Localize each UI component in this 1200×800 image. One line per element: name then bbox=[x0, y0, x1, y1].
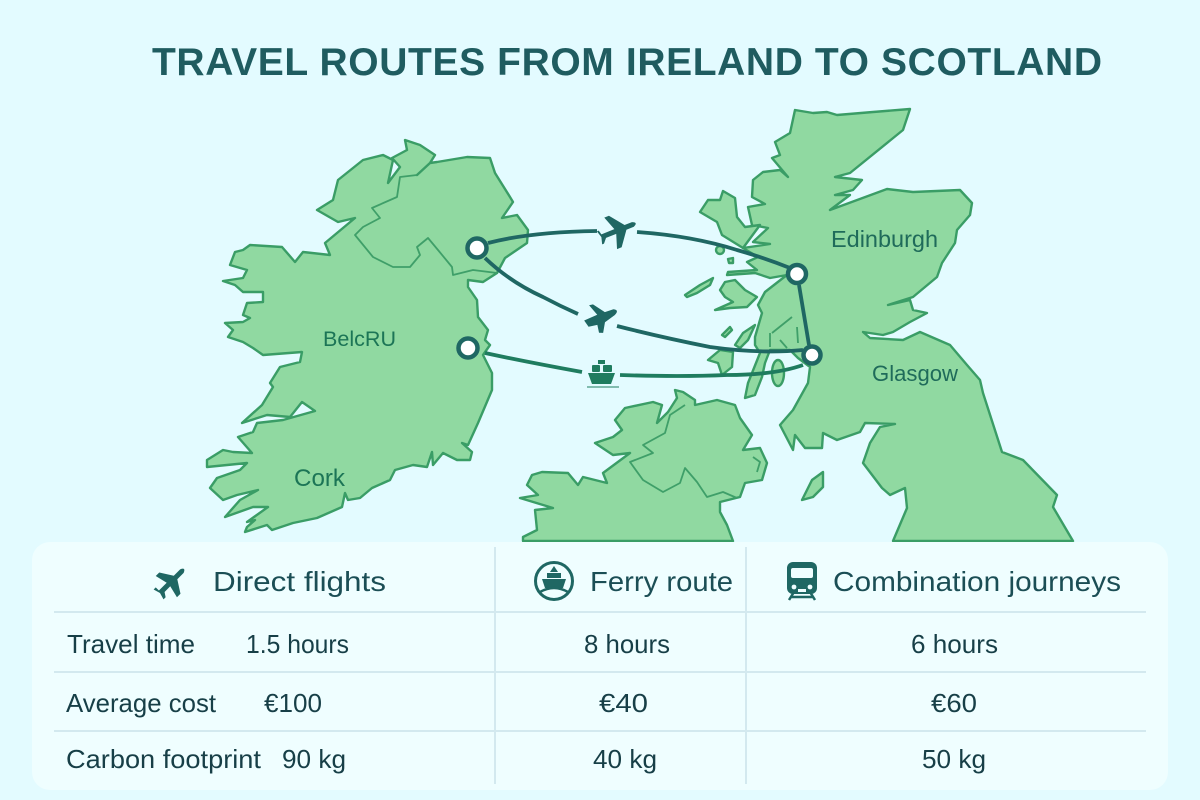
row: average cost: €60 bbox=[931, 688, 977, 718]
row: average cost: €40 bbox=[599, 688, 648, 718]
map: Scotland and northern England bbox=[685, 109, 1073, 541]
place labels: Glasgow bbox=[872, 361, 958, 386]
icon: plane on southern route bbox=[581, 300, 621, 336]
icon: ferry on route bbox=[587, 360, 619, 387]
row: carbon footprint: 40 kg bbox=[593, 744, 657, 774]
place labels: Edinburgh bbox=[831, 226, 938, 252]
panel: comparison table bbox=[32, 542, 1168, 790]
map: lower Ireland inset bbox=[520, 390, 767, 541]
row: carbon footprint: Carbon footprint bbox=[66, 744, 262, 774]
place labels bbox=[294, 226, 958, 492]
icon: ferry badge bbox=[536, 562, 572, 600]
route stops bbox=[458, 238, 820, 364]
row: travel time: 6 hours bbox=[911, 629, 998, 659]
icon: direct flights plane bbox=[148, 558, 195, 605]
row: travel time: 8 hours bbox=[584, 629, 670, 659]
flight route: northern bbox=[488, 231, 790, 268]
row: average cost bbox=[66, 688, 977, 718]
connection between Scottish stops bbox=[799, 285, 809, 345]
place labels: BelcRU bbox=[323, 328, 396, 351]
heading: ferry route: Ferry route bbox=[590, 566, 733, 597]
row: average cost: €100 bbox=[264, 688, 322, 718]
row: carbon footprint: 50 kg bbox=[922, 744, 986, 774]
place labels: Cork bbox=[294, 465, 346, 492]
heading: direct flights: Direct flights bbox=[213, 566, 386, 597]
icon: plane on northern route bbox=[593, 207, 642, 254]
title: TRAVEL ROUTES FROM IRELAND TO SCOTLAND bbox=[152, 41, 1102, 84]
ferry route bbox=[485, 353, 803, 376]
row: travel time: 1.5 hours bbox=[246, 629, 349, 659]
row: travel time bbox=[67, 629, 998, 659]
Irish border bbox=[355, 175, 497, 275]
row: travel time: Travel time bbox=[67, 629, 195, 659]
icon: train bbox=[787, 562, 817, 600]
row: carbon footprint: 90 kg bbox=[282, 744, 346, 774]
heading: combination journeys: Combination journeys bbox=[833, 566, 1121, 597]
row: average cost: Average cost bbox=[66, 688, 217, 718]
flight route: southern bbox=[485, 258, 803, 351]
peninsula sea lochs bbox=[770, 317, 798, 348]
map: Ireland bbox=[207, 140, 528, 532]
row: carbon footprint bbox=[66, 744, 986, 774]
